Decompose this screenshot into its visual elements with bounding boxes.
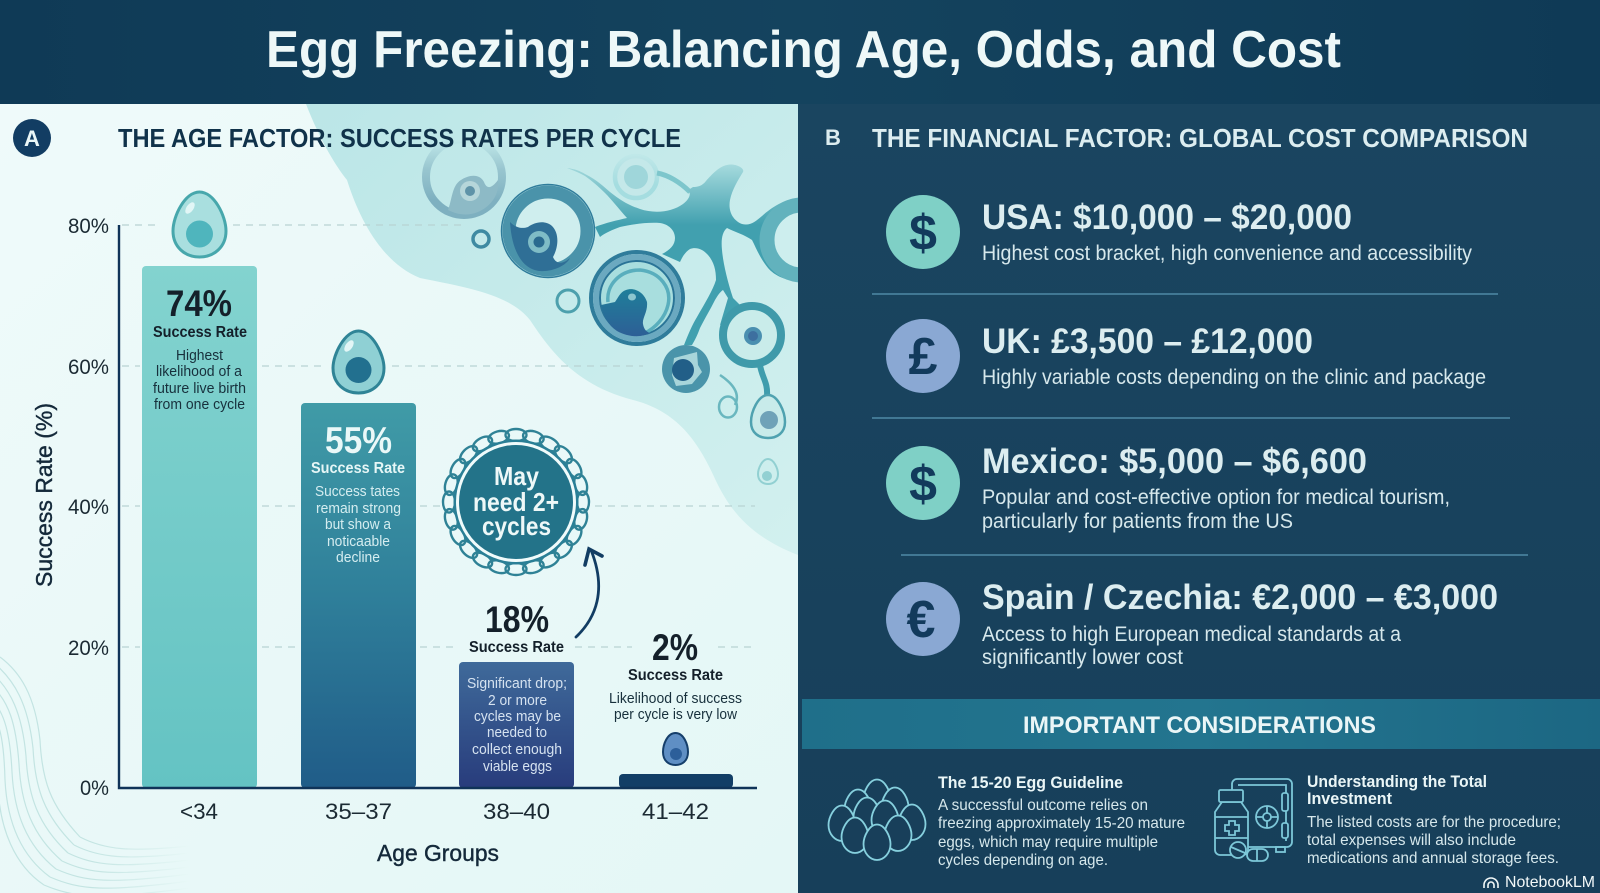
icon: egg [663,733,688,765]
arrow: 18% to callout [576,549,602,637]
x axis labels: 38–40 [483,799,550,824]
cell: large ring 1 [502,184,594,278]
x axis labels [181,804,708,819]
panel: the financial factor [798,104,1600,893]
icon: euro [886,582,960,656]
bar: 38-40: viable eggs [483,758,552,775]
bar: 38-40: needed to [487,724,547,741]
cell: right ring [723,306,781,364]
bar: 35-37: decline [336,549,380,566]
decorative cell background [306,104,837,555]
bar: 35-37: remain strong [316,500,401,517]
row: USA [886,195,1472,269]
x axis labels: 35–37 [325,799,392,824]
y axis title: Success Rate (%) [31,403,57,587]
icon: egg cluster [828,780,926,860]
bar: 41-42: Likelihood of success [609,690,742,707]
y axis labels: 80% [68,215,109,238]
bar: 41-42: Success Rate [628,667,723,684]
bar: 38-40: cycles may be [474,708,561,725]
y axis labels: 20% [68,637,109,660]
right clipped ring [760,198,798,282]
heading: financial factor: THE FINANCIAL FACTOR: GLOBAL COST COMPARISON [872,123,1528,153]
title: Egg Freezing: Balancing Age, Odds, and Cost [266,21,1341,79]
row: Spain and Czechia: Spain / Czechia: €2,000 – €3,000 [982,578,1498,617]
callout badge: may need 2+ cycles: cycles [482,511,551,541]
cell: embryo [662,345,710,393]
icon: pound [886,319,960,393]
row: Mexico: particularly for patients from the US [982,510,1293,533]
y axis labels: 0% [80,777,109,800]
block: total investment: total expenses will also include [1307,832,1516,849]
row: UK: Highly variable costs depending on the clinic and package [982,366,1486,389]
heading: age factor: THE AGE FACTOR: SUCCESS RATES PER CYCLE [118,123,681,153]
icon: egg [333,331,384,393]
icon: dollar: $ [909,205,937,261]
decorative contour lines [0,656,168,893]
x axis labels: 41–42 [642,799,709,824]
x axis labels: <34 [180,799,218,824]
bar: 38-40: 18% [485,599,549,640]
row: Mexico: Popular and cost-effective option for medical tourism, [982,486,1450,509]
bar: 38-40: 2 or more [488,692,547,709]
bar: under 34: future live birth [153,380,246,397]
bar: 38-40: Significant drop; [467,675,567,692]
row: Spain and Czechia: significantly lower cost [982,646,1183,669]
grid lines [122,225,757,647]
y axis labels: 60% [68,356,109,379]
panel: the age factor [0,104,837,893]
block: egg guideline: A successful outcome relies on [938,797,1148,814]
row: Mexico [886,442,1450,533]
cell: large ring 2 [591,252,683,344]
icon: safe and medicine [1215,779,1292,861]
faded cell with nucleus [426,139,502,215]
bar: under 34: Highest [176,347,224,364]
small rings [473,231,579,312]
bar: under 34: from one cycle [154,396,245,413]
bar: 35-37: 55% [325,420,392,461]
icon: pound: £ [909,328,938,386]
x axis title: Age Groups [377,840,499,866]
bar: 35-37: Success tates [315,483,400,500]
bar: 35-37: noticaable [327,533,390,550]
row: UK [886,319,1486,393]
banner: important considerations [802,699,1600,749]
bar: under 34: 74% [166,283,232,324]
bar: 38-40: collect enough [472,741,562,758]
block: total investment: Understanding the Total [1307,772,1487,791]
block: total investment: medications and annual storage fees. [1307,850,1559,867]
section badge A [13,119,51,157]
block: total investment: Investment [1307,789,1392,808]
callout badge: may need 2+ cycles [443,429,589,575]
bar: 35-37: Success Rate [311,460,405,477]
header banner [0,0,1600,104]
bar: 38-40: Success Rate [469,639,564,656]
row: UK: UK: £3,500 – £12,000 [982,322,1313,361]
row: Spain and Czechia [886,578,1498,669]
block: egg guideline [828,773,1185,869]
row: Spain and Czechia: Access to high European medical standards at a [982,623,1401,646]
bar: 35-37 [301,331,416,788]
axes [119,225,757,788]
block: total investment [1215,772,1561,867]
icon: dollar [886,195,960,269]
bar: under 34: likelihood of a [156,363,243,380]
bar: 35-37: but show a [325,516,392,533]
bar: under 34: Success Rate [153,324,247,341]
watermark: NotebookLM: NotebookLM [1505,874,1595,891]
icon: dollar [886,446,960,520]
bar: 38-40 [459,599,574,788]
block: total investment: The listed costs are for the procedure; [1307,814,1561,831]
row: USA: Highest cost bracket, high convenience and accessibility [982,242,1472,265]
row: USA: USA: $10,000 – $20,000 [982,198,1352,237]
block: egg guideline: eggs, which may require multiple [938,834,1158,851]
eggs in background [751,395,785,484]
icon: egg [173,192,226,257]
section badge A: A [24,126,40,151]
bar: 41-42: 2% [652,627,698,668]
callout badge: may need 2+ cycles: need 2+ [473,487,559,517]
bar: under 34 [142,192,257,788]
block: egg guideline: The 15-20 Egg Guideline [938,773,1123,792]
block: egg guideline: cycles depending on age. [938,852,1108,869]
small teardrop [719,396,737,418]
row: Mexico: Mexico: $5,000 – $6,600 [982,442,1367,481]
y axis labels: 40% [68,496,109,519]
callout badge: may need 2+ cycles: May [494,461,539,491]
icon: dollar: $ [909,456,937,512]
bar: 41-42 [609,627,742,788]
faded top cell [615,156,690,198]
banner: important considerations: IMPORTANT CONSIDERATIONS [1023,712,1376,739]
icon: euro: € [907,591,935,649]
branching cell network [567,165,800,345]
section badge B: B [825,125,841,150]
y axis labels [68,215,109,800]
block: egg guideline: freezing approximately 15-20 mature [938,815,1185,832]
bar chart [31,192,757,866]
bar: 41-42: per cycle is very low [614,706,737,723]
